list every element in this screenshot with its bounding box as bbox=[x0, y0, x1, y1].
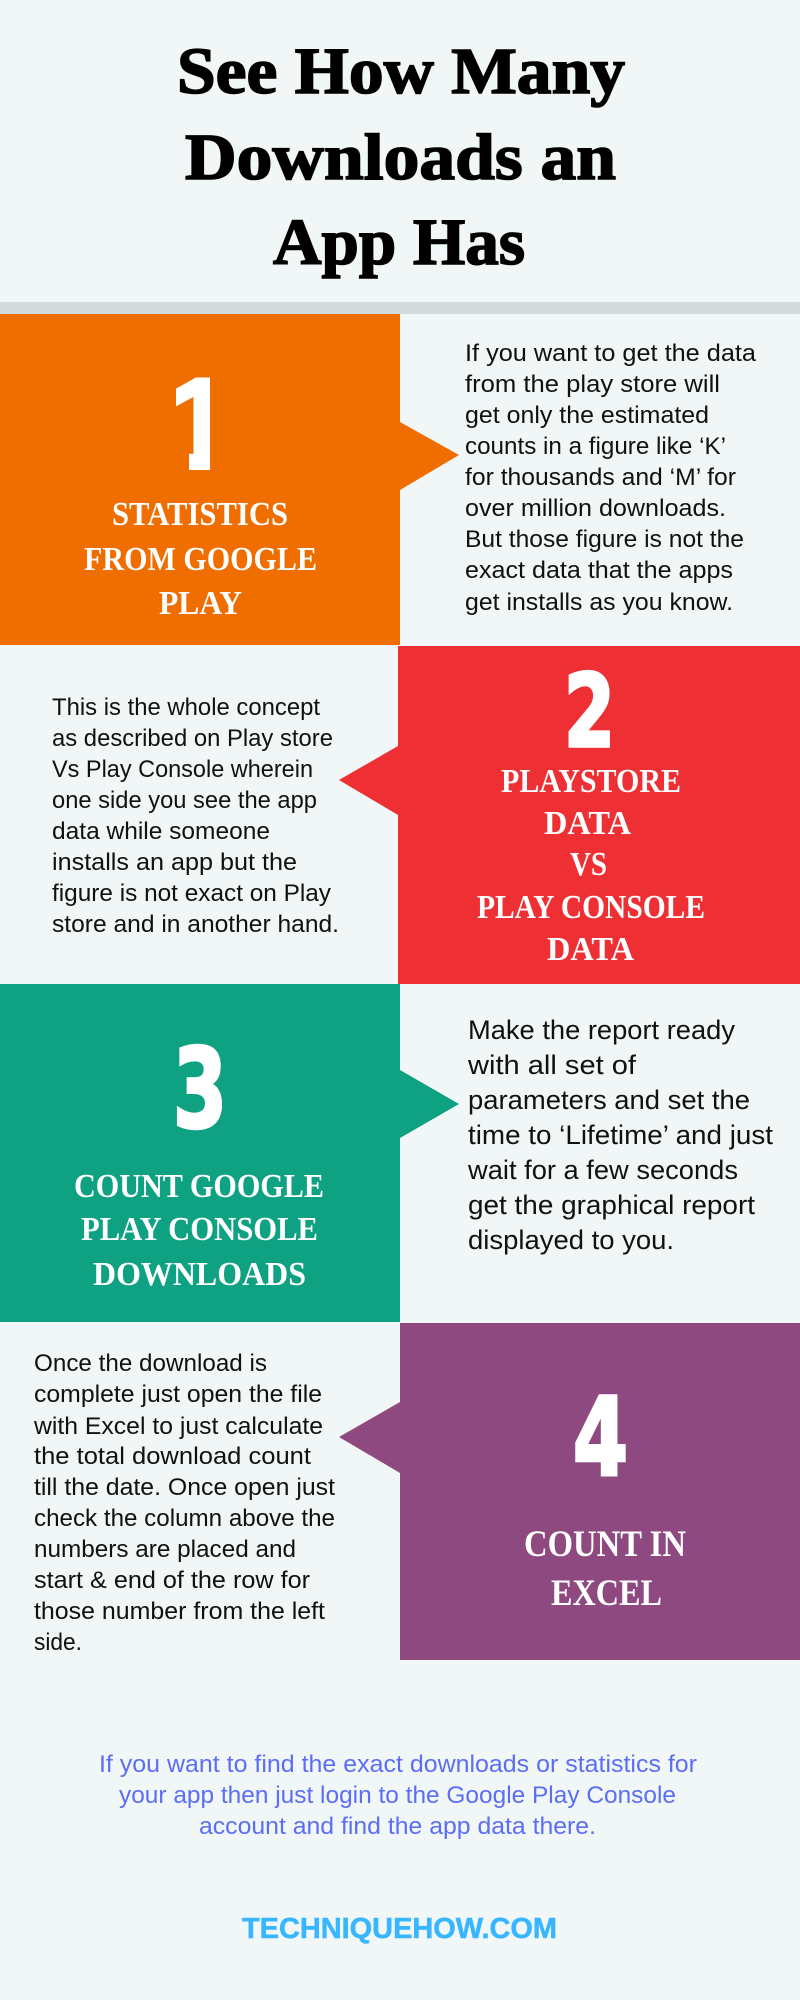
step 4 body text: the total download count bbox=[34, 1443, 311, 1470]
step 3 body text: Make the report ready bbox=[468, 1015, 735, 1045]
step 1 heading: PLAY bbox=[159, 585, 242, 622]
step 3 body text bbox=[467, 1015, 774, 1255]
closing note: account and find the app data there. bbox=[199, 1813, 596, 1840]
step 2 body text: Vs Play Console wherein bbox=[52, 756, 313, 783]
step 1 heading bbox=[84, 496, 317, 622]
step 2 heading bbox=[477, 763, 705, 968]
step 2 body text: one side you see the app bbox=[52, 787, 317, 814]
step 1 body text: get only the estimated bbox=[465, 402, 709, 429]
step 3 heading: DOWNLOADS bbox=[93, 1256, 306, 1293]
step 2 body text: store and in another hand. bbox=[52, 911, 339, 938]
step 3 heading bbox=[74, 1168, 324, 1293]
panel: step 2 playstore data vs play console data bbox=[52, 646, 800, 984]
panel: step 3 count Google Play Console downloads bbox=[0, 984, 774, 1322]
step 3 body text: parameters and set the bbox=[468, 1085, 750, 1115]
step 4 body text: those number from the left bbox=[34, 1598, 325, 1625]
step 1 body text: for thousands and ‘M’ for bbox=[465, 464, 736, 491]
header divider bar bbox=[0, 302, 800, 314]
step 4 body text: Once the download is bbox=[34, 1350, 267, 1377]
step 3 heading: COUNT GOOGLE bbox=[74, 1168, 324, 1205]
step 4 heading: EXCEL bbox=[551, 1573, 662, 1614]
step 1 body text: counts in a figure like ‘K’ bbox=[465, 433, 726, 460]
step 1 body text: But those figure is not the bbox=[465, 526, 744, 553]
step 2 body text: as described on Play store bbox=[52, 725, 333, 752]
title: Downloads an bbox=[185, 121, 616, 194]
step 2 heading: VS bbox=[570, 846, 607, 883]
number 1: 1 bbox=[160, 350, 244, 496]
step 4 body text: start & end of the row for bbox=[34, 1567, 310, 1594]
step 4 body text bbox=[33, 1350, 335, 1656]
step 2 heading: PLAY CONSOLE bbox=[477, 889, 705, 926]
step 4 body text: complete just open the file bbox=[34, 1381, 322, 1408]
green block with arrow bbox=[0, 984, 459, 1322]
step 1 heading: FROM GOOGLE bbox=[84, 541, 317, 578]
orange block with arrow bbox=[0, 314, 459, 645]
red block with arrow bbox=[339, 646, 800, 984]
panel: step 1 statistics from Google Play bbox=[0, 314, 756, 645]
step 4 heading bbox=[524, 1524, 686, 1614]
number 2: 2 bbox=[564, 653, 615, 770]
step 2 body text: figure is not exact on Play bbox=[52, 880, 332, 907]
number 4: 4 bbox=[573, 1376, 628, 1501]
step 4 body text: with Excel to just calculate bbox=[33, 1413, 323, 1440]
step 4 body text: check the column above the bbox=[34, 1505, 335, 1532]
step 2 heading: DATA bbox=[544, 805, 631, 842]
closing note: If you want to find the exact downloads or statistics for bbox=[99, 1751, 697, 1778]
step 2 body text: This is the whole concept bbox=[52, 694, 320, 721]
step 2 body text: installs an app but the bbox=[52, 849, 297, 876]
panel: step 4 count in Excel bbox=[33, 1323, 800, 1660]
title bbox=[177, 35, 625, 279]
step 2 heading: PLAYSTORE bbox=[501, 763, 681, 800]
step 1 heading: STATISTICS bbox=[112, 496, 288, 533]
step 4 body text: till the date. Once open just bbox=[34, 1474, 335, 1501]
step 2 heading: DATA bbox=[547, 931, 634, 968]
step 3 body text: wait for a few seconds bbox=[467, 1155, 738, 1185]
step 3 body text: with all set of bbox=[467, 1050, 637, 1080]
step 1 body text: from the play store will bbox=[465, 371, 720, 398]
step 4 heading: COUNT IN bbox=[524, 1524, 686, 1565]
title: App Has bbox=[273, 206, 525, 279]
website credit: TECHNIQUEHOW.COM bbox=[242, 1913, 557, 1945]
step 2 body text bbox=[52, 694, 339, 938]
step 3 body text: displayed to you. bbox=[468, 1225, 674, 1255]
title: See How Many bbox=[177, 35, 625, 108]
purple block with arrow bbox=[339, 1323, 800, 1660]
step 3 body text: time to ‘Lifetime’ and just bbox=[468, 1120, 774, 1150]
step 3 heading: PLAY CONSOLE bbox=[81, 1211, 318, 1248]
step 1 body text: over million downloads. bbox=[465, 495, 726, 522]
closing note: your app then just login to the Google Play Console bbox=[119, 1782, 676, 1809]
step 4 body text: side. bbox=[34, 1629, 82, 1656]
step 1 body text: If you want to get the data bbox=[465, 340, 756, 367]
step 1 body text bbox=[465, 340, 756, 616]
number 3: 3 bbox=[173, 1025, 227, 1153]
step 3 body text: get the graphical report bbox=[468, 1190, 756, 1220]
step 2 body text: data while someone bbox=[52, 818, 270, 845]
step 1 body text: exact data that the apps bbox=[465, 557, 733, 584]
step 1 body text: get installs as you know. bbox=[465, 589, 733, 616]
closing note bbox=[99, 1751, 697, 1840]
step 4 body text: numbers are placed and bbox=[34, 1536, 296, 1563]
